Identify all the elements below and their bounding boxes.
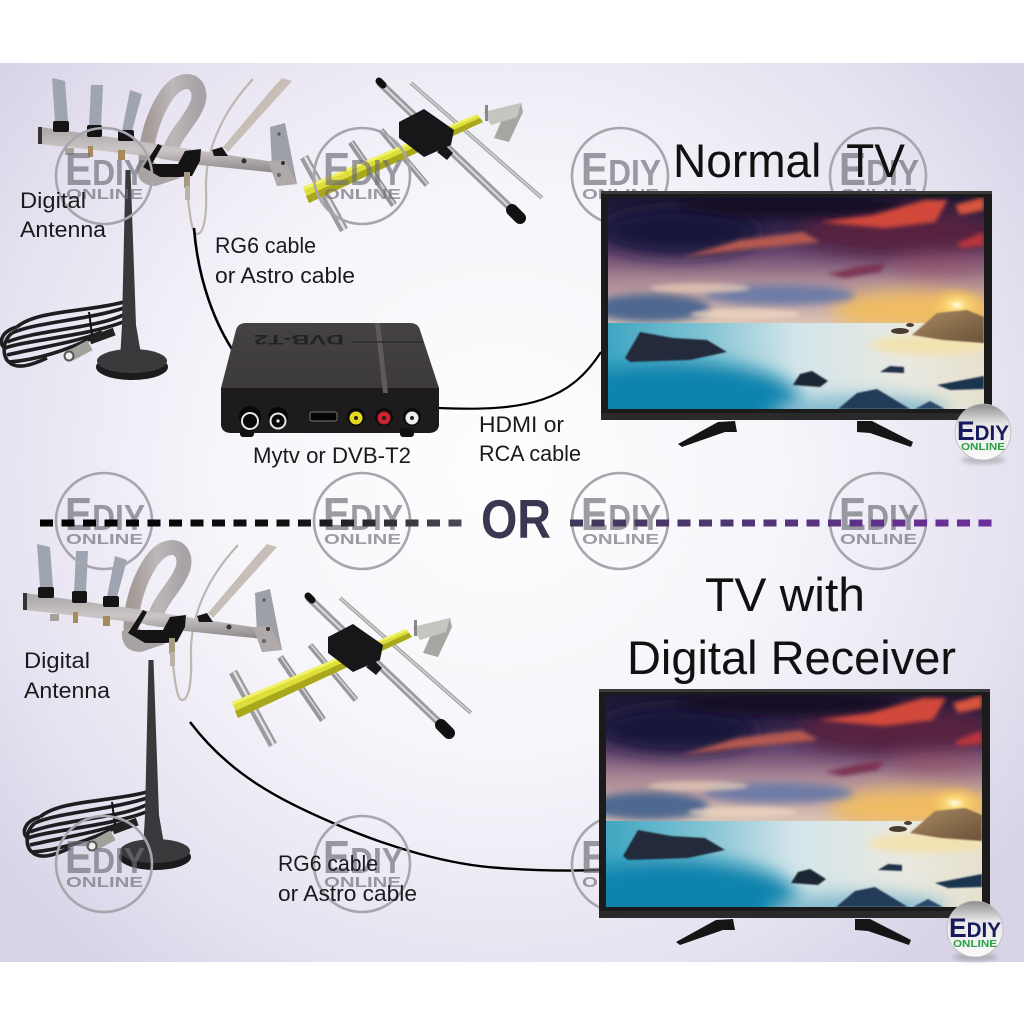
cable: antenna to digital TV (190, 722, 600, 871)
title: TV with Digital Receiver: Digital Receiver (627, 631, 956, 684)
label: top RG6 cable: RG6 cable (215, 233, 316, 258)
bottom UHF antenna (23, 544, 282, 700)
watermarks: EDIY (65, 831, 145, 883)
label: HDMI or RCA cable (479, 412, 581, 466)
label: top digital antenna (20, 188, 107, 242)
watermarks: EDIY (839, 831, 919, 883)
logo badge: top: EDIY (957, 416, 1009, 446)
watermarks: EDIY (581, 488, 661, 540)
watermarks: ONLINE (840, 186, 917, 203)
watermarks: ONLINE (582, 874, 659, 891)
top UHF antenna (38, 78, 297, 234)
divider: black dashes (40, 520, 462, 526)
label: bottom digital antenna (24, 648, 111, 703)
watermarks: EDIY (581, 143, 661, 195)
top television (560, 191, 1000, 447)
logo badge: bottom: ONLINE (953, 939, 997, 950)
label: bottom RG6 cable: or Astro cable (278, 881, 417, 906)
label: bottom digital antenna: Digital (24, 648, 90, 673)
watermarks: EDIY (323, 488, 403, 540)
title: TV with Digital Receiver: TV with (705, 568, 865, 621)
label: receiver: Mytv or DVB-T2 (253, 443, 411, 468)
label: bottom digital antenna: Antenna (24, 678, 111, 703)
divider: purple dashes (570, 520, 993, 526)
top yagi antenna (303, 81, 542, 230)
watermarks: EDIY (839, 488, 919, 540)
label: top RG6 cable: or Astro cable (215, 263, 355, 288)
OR heading: OR (481, 488, 551, 550)
DVB-T2 receiver box: DVB-T2 (254, 332, 344, 348)
logo badge: top (955, 404, 1011, 464)
watermarks: ONLINE (582, 531, 659, 548)
DVB-T2 receiver box (221, 323, 439, 437)
watermarks: ONLINE (324, 874, 401, 891)
label: HDMI or RCA cable: HDMI or (479, 412, 564, 437)
cable: antenna to receiver (194, 228, 236, 355)
watermarks: ONLINE (66, 186, 143, 203)
label: HDMI or RCA cable: RCA cable (479, 441, 581, 466)
watermarks: ONLINE (66, 874, 143, 891)
watermarks: ONLINE (324, 531, 401, 548)
label: top RG6 cable (215, 233, 355, 288)
label: bottom RG6 cable (278, 851, 417, 906)
watermarks: ONLINE (66, 531, 143, 548)
watermarks: ONLINE (324, 186, 401, 203)
watermarks: EDIY (65, 143, 145, 195)
watermarks: EDIY (323, 143, 403, 195)
logo badge: top: ONLINE (961, 442, 1005, 453)
bottom television (558, 689, 998, 945)
logo badge: bottom (947, 901, 1003, 961)
label: bottom RG6 cable: RG6 cable (278, 851, 378, 876)
title: Normal TV: Normal TV (673, 134, 906, 187)
watermarks: EDIY (65, 488, 145, 540)
watermarks (56, 128, 926, 912)
label: top digital antenna: Antenna (20, 217, 107, 242)
top magnetic whip antenna (1, 170, 168, 380)
bottom yagi antenna (232, 596, 471, 745)
label: top digital antenna: Digital (20, 188, 86, 213)
watermarks: ONLINE (840, 874, 917, 891)
watermarks: ONLINE (582, 186, 659, 203)
watermarks: EDIY (581, 831, 661, 883)
watermarks: ONLINE (840, 531, 917, 548)
logo badge: bottom: EDIY (949, 913, 1001, 943)
cable: receiver to TV (438, 352, 601, 409)
watermarks: EDIY (839, 143, 919, 195)
watermarks: EDIY (323, 831, 403, 883)
bottom magnetic whip antenna (24, 660, 191, 870)
title: TV with Digital Receiver (627, 568, 956, 684)
